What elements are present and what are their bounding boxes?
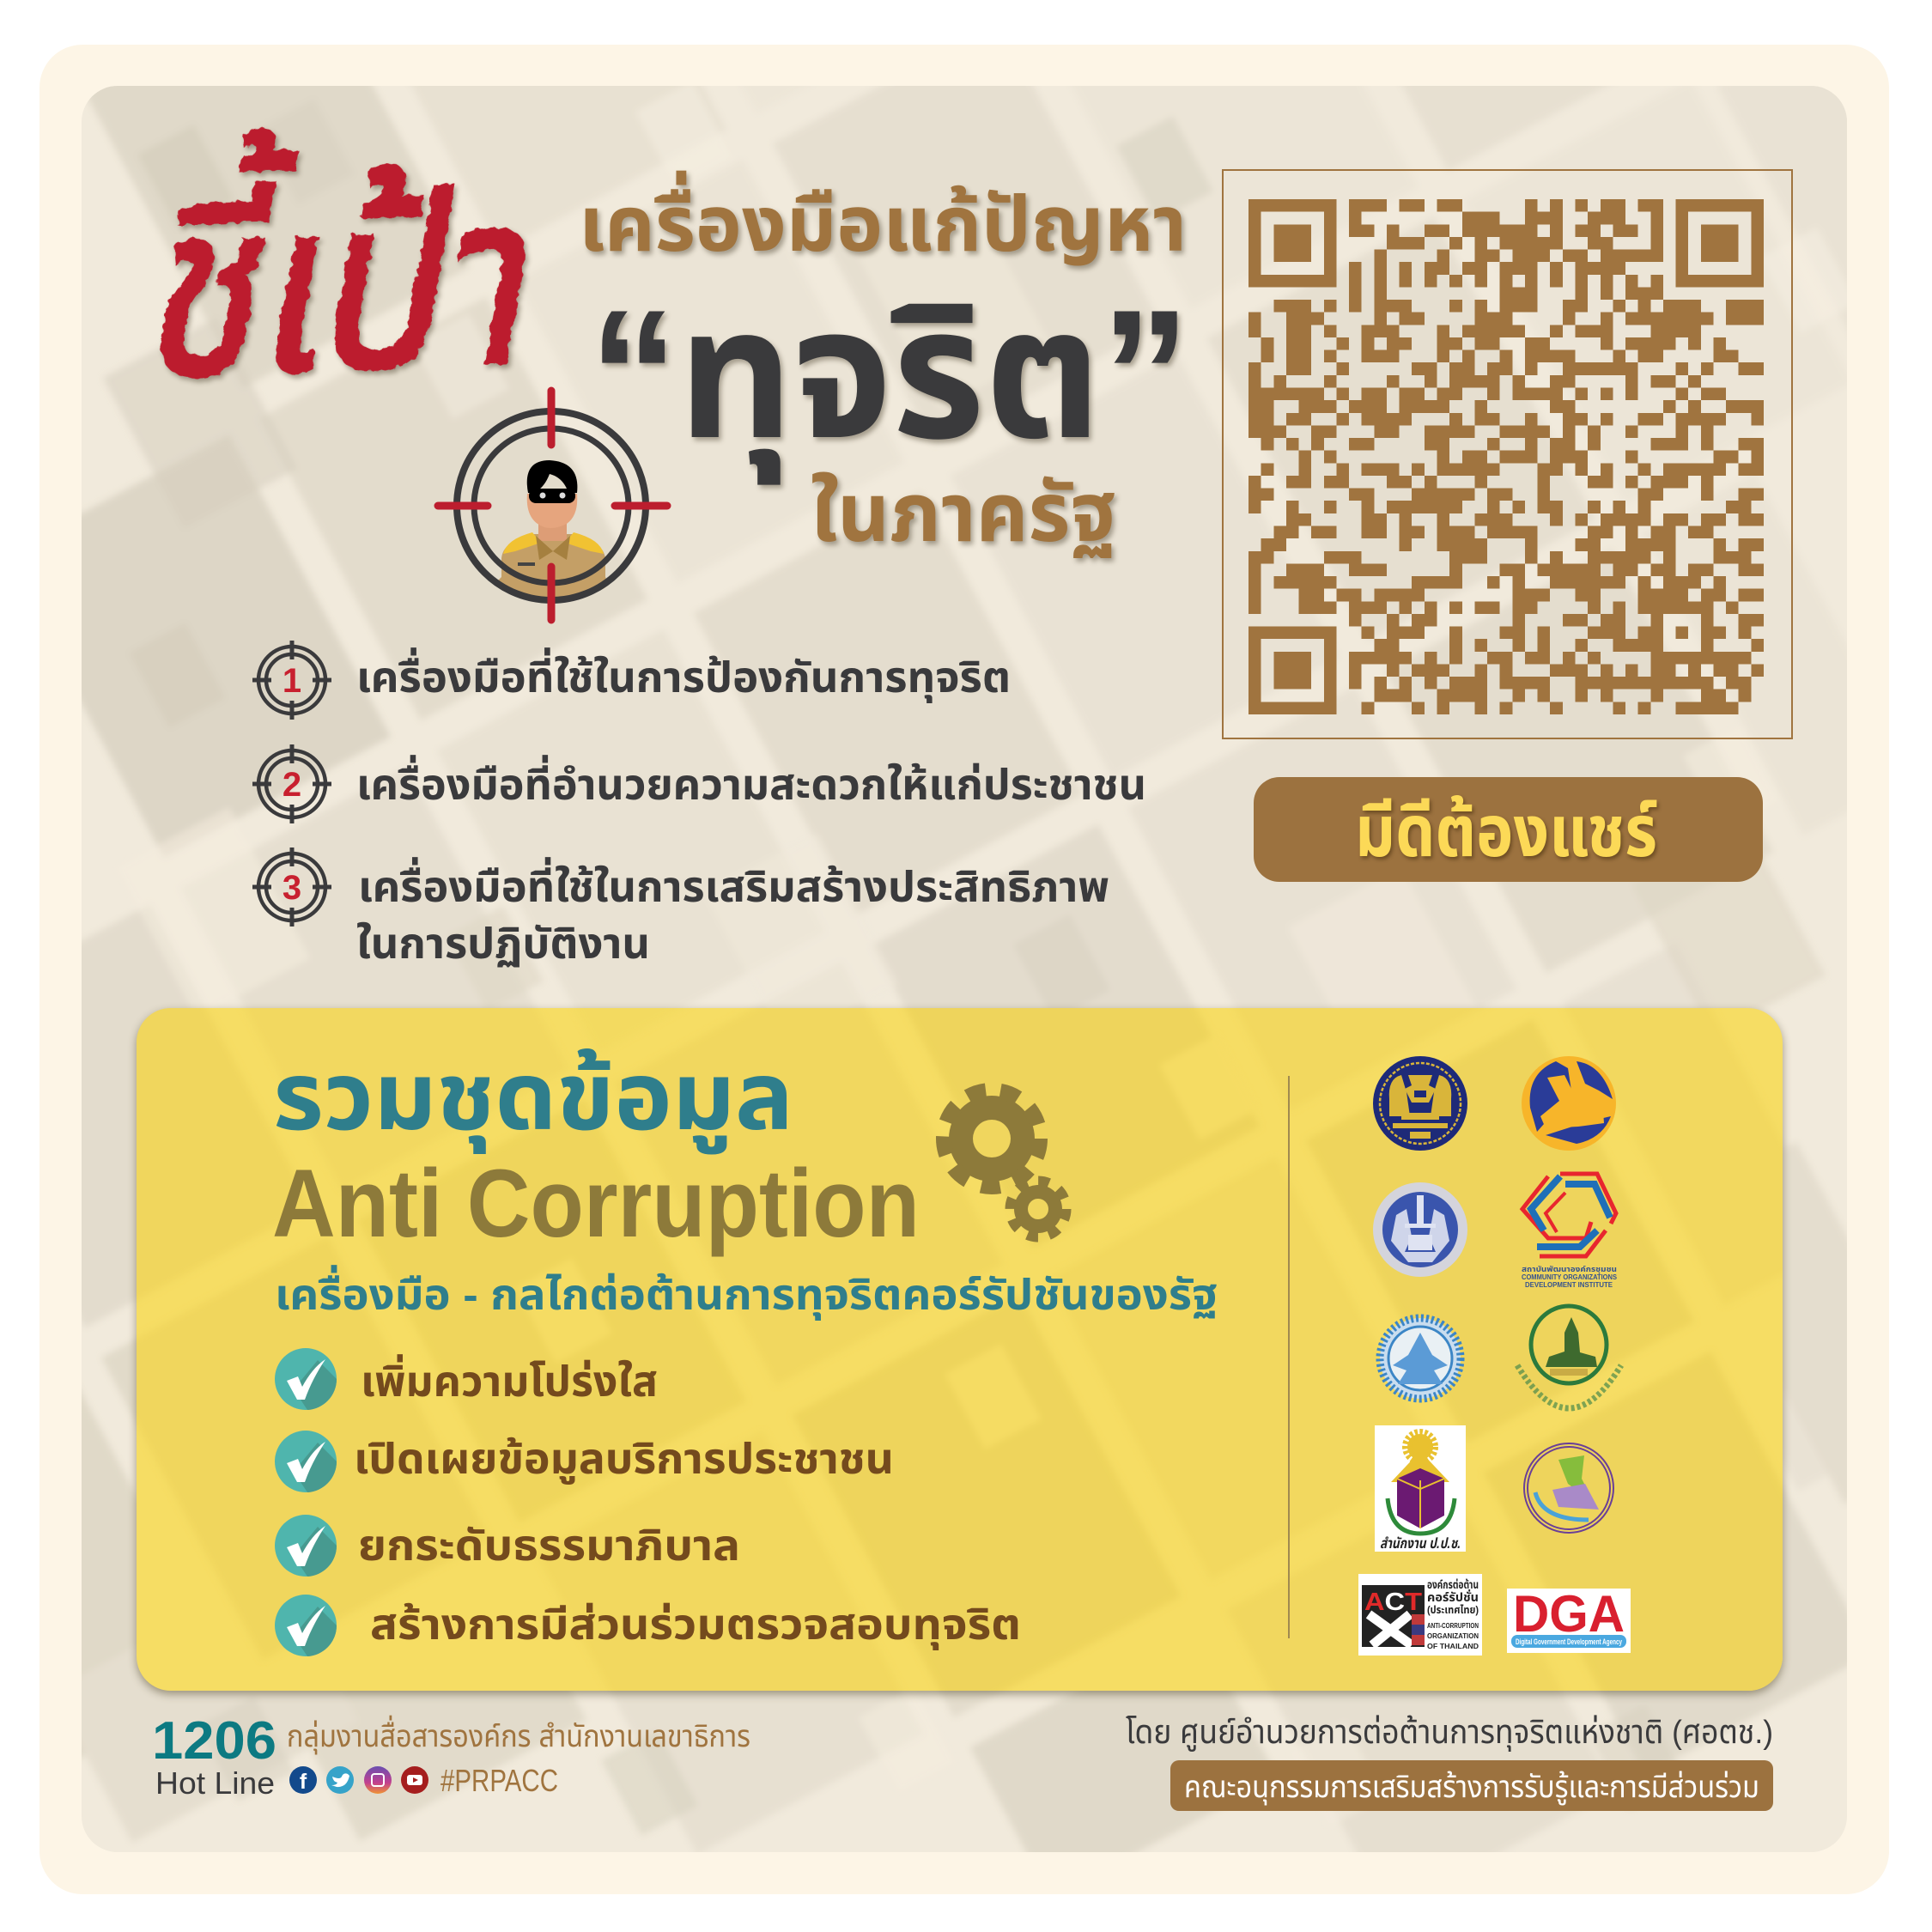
check item 4: สร้างการมีส่วนร่วมตรวจสอบทุจริต (370, 1601, 1021, 1650)
logo: digital economy ministry (1517, 1306, 1621, 1408)
list item 1: 1 (283, 662, 301, 700)
logo: ACT: (ประเทศไทย) (1427, 1604, 1479, 1616)
list item 3: 3 (283, 869, 301, 907)
button: must share: มีดีต้องแชร์ (1355, 791, 1657, 872)
footer: hotline and social: Hot Line (155, 1765, 275, 1801)
check item 2: เปิดเผยข้อมูลบริการประชาชน (354, 1435, 894, 1485)
logo: ACT: ORGANIZATION (1427, 1632, 1479, 1640)
panel heading english: Anti Corruption (272, 1150, 920, 1257)
heading: in public sector: ในภาครัฐ (811, 468, 1116, 559)
logo: DGA: Digital Government Development Agency (1516, 1637, 1622, 1646)
icons: social media (289, 1766, 428, 1794)
logo: blue silver seal (1373, 1182, 1467, 1277)
heading: tools to solve: เครื่องมือแก้ปัญหา (579, 170, 1187, 268)
logo: blue filigree seal (1380, 1318, 1461, 1399)
logo: ACT: ACT (1364, 1589, 1422, 1616)
QR code panel (1223, 170, 1792, 738)
logo: ACT: OF THAILAND (1427, 1643, 1479, 1650)
list item 3: เครื่องมือที่ใช้ในการเสริมสร้างประสิทธิภาพ (358, 857, 1109, 911)
check item 3 (275, 1515, 740, 1577)
list item 2: 2 (283, 766, 301, 804)
icon: gears (944, 1091, 1066, 1237)
footer: hotline and social: #PRPACC (440, 1763, 558, 1798)
footer: hotline and social: 1206 (152, 1711, 276, 1771)
icons: social media: f (300, 1770, 307, 1794)
list: three tool types (252, 641, 1146, 968)
list item 2 (252, 744, 1146, 823)
button: must share (1254, 777, 1763, 882)
logo: community organizations institute: COMMUNITY ORGANIZATIONS (1522, 1273, 1618, 1281)
list item 1: เครื่องมือที่ใช้ในการป้องกันการทุจริต (356, 647, 1011, 703)
footer: hotline and social: กลุ่มงานสื่อสารองค์กร สำนักงานเลขาธิการ (287, 1715, 750, 1754)
logos grid (1358, 1056, 1631, 1656)
logo: ACT: คอร์รัปชั่น (1427, 1589, 1479, 1604)
logo: ACT: ANTI-CORRUPTION (1427, 1622, 1479, 1630)
logo: purple ring figure (1524, 1443, 1613, 1533)
check item 2 (275, 1431, 894, 1492)
panel heading: รวมชุดข้อมูล (273, 1044, 793, 1154)
list item 1 (252, 641, 1011, 720)
logo: ACT (1358, 1574, 1482, 1656)
logo: orange lion seal (1522, 1056, 1616, 1151)
list item 3 (252, 848, 1109, 968)
list item 3: ในการปฏิบัติงาน (356, 920, 650, 968)
check item 1: เพิ่มความโปร่งใส (361, 1354, 658, 1406)
logo: DGA: DGA (1513, 1585, 1625, 1643)
logo: community organizations institute: DEVELOPMENT INSTITUTE (1525, 1281, 1613, 1289)
footer: organisation credit: โดย ศูนย์อำนวยการต่อต้านการทุจริตแห่งชาติ (ศอตช.) (1126, 1715, 1773, 1752)
heading: corruption: “ทุจริต” (589, 272, 1190, 485)
icon: official in crosshair target (438, 391, 667, 620)
footer: organisation credit (1126, 1715, 1773, 1811)
check item 1 (275, 1348, 658, 1410)
panel subheading: เครื่องมือ - กลไกต่อต้านการทุจริตคอร์รัปชันของรัฐ (275, 1265, 1218, 1321)
footer: organisation credit: คณะอนุกรรมการเสริมสร้างการรับรู้และการมีส่วนร่วม (1184, 1769, 1759, 1805)
logo: NACC (1375, 1425, 1466, 1552)
list item 2: เครื่องมือที่อำนวยความสะดวกให้แก่ประชาชน (356, 755, 1146, 809)
logo: community organizations institute: สถาบันพัฒนาองค์กรชุมชน (1522, 1265, 1617, 1273)
check item 3: ยกระดับธรรมาภิบาล (358, 1522, 740, 1570)
logo: navy gold seal (1373, 1056, 1467, 1151)
footer: hotline and social (152, 1711, 750, 1801)
logo: NACC: สำนักงาน ป.ป.ช. (1380, 1535, 1461, 1552)
logo: community organizations institute (1522, 1174, 1618, 1289)
check item 4 (275, 1595, 1021, 1656)
panel: anti corruption dataset (131, 1006, 1788, 1793)
logo: ACT: องค์กรต่อต้าน (1427, 1578, 1479, 1591)
title: brush word: ชี้เป้า (132, 119, 533, 426)
